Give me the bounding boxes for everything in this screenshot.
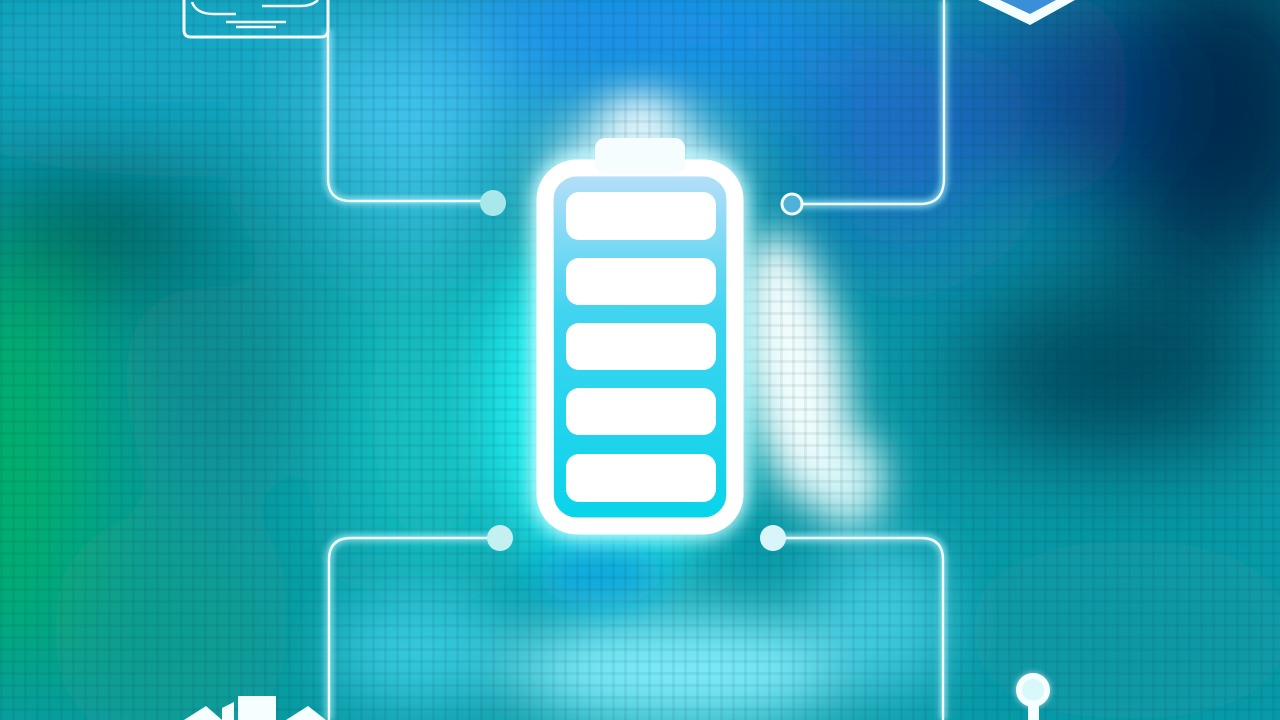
battery terminal	[595, 138, 685, 174]
charge cell 2	[566, 258, 716, 305]
connector node: bottom left	[487, 525, 513, 551]
charge cell 3	[566, 323, 716, 370]
battery casing	[545, 168, 735, 526]
icon: document card, top left	[184, 0, 328, 37]
icon: key pin, bottom right	[1015, 672, 1051, 720]
connector node: top right	[782, 194, 802, 214]
charge cell 5	[566, 454, 716, 502]
connector node: top left	[480, 190, 506, 216]
connector node: bottom right	[760, 525, 786, 551]
circuit connectors	[328, 0, 944, 720]
battery interior tint	[554, 176, 726, 518]
charge cell 1	[566, 192, 716, 240]
icon: shield, top right	[978, 0, 1075, 25]
charge cell 4	[566, 388, 716, 435]
battery icon	[545, 138, 735, 526]
icon: blocks, bottom left	[184, 696, 326, 720]
